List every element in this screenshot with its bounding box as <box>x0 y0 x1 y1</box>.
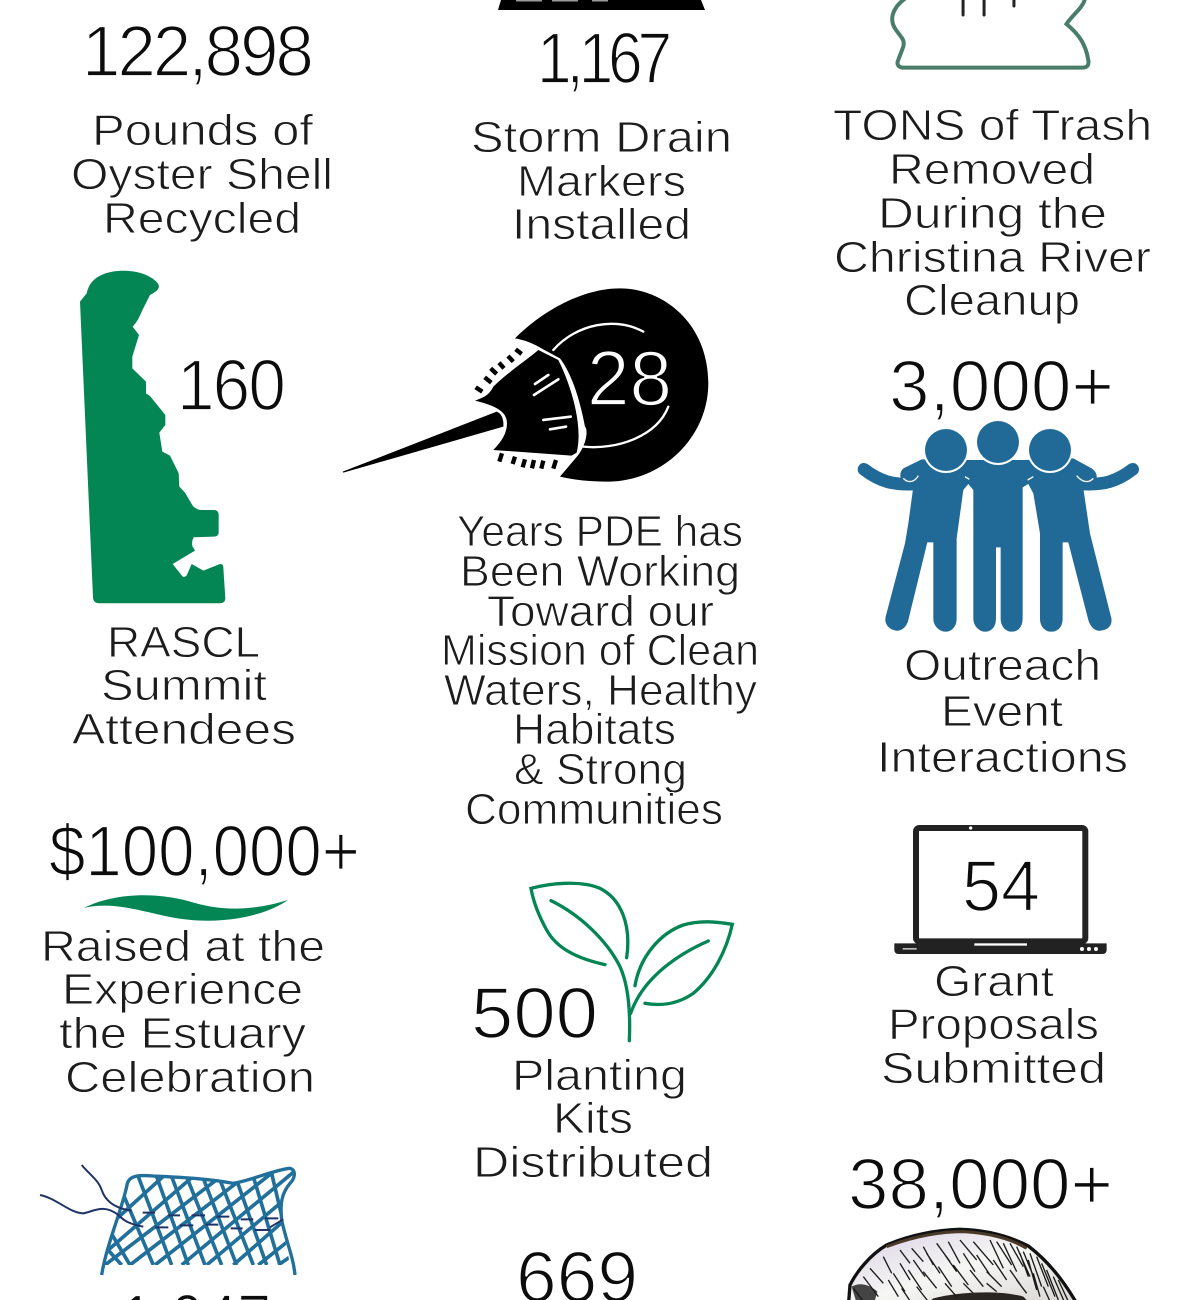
stat: storm drain markers <box>471 0 732 249</box>
label: outreach event interactions <box>877 641 1128 782</box>
number: 28: 28 <box>587 334 672 422</box>
number: 54: 54 <box>962 847 1040 927</box>
label: years PDE has been working toward mission: & Strong <box>514 745 687 794</box>
label: years PDE has been working toward mission: Waters, Healthy <box>444 666 757 715</box>
number: 500: 500 <box>471 974 598 1054</box>
stat: 38,000+ oysters <box>848 1145 1113 1300</box>
number: $100,000+: $100,000+ <box>49 812 360 892</box>
label: grant proposals submitted: Submitted <box>881 1044 1106 1093</box>
icon: storm drain marker <box>498 0 705 10</box>
label: RASCL summit attendees: Summit <box>101 661 267 710</box>
icon: trash bag <box>892 0 1088 68</box>
label: raised at the celebration: Experience <box>62 965 303 1014</box>
label: tons of trash removed: During the <box>878 189 1107 238</box>
stat: planting kits distributed <box>471 883 732 1187</box>
label: pounds of oyster shell recycled: Recycled <box>103 194 301 243</box>
icon: laptop <box>894 826 1107 954</box>
label: tons of trash removed: Christina River <box>834 233 1151 282</box>
stat: years PDE has been working <box>343 288 759 834</box>
label: outreach event interactions: Interactions <box>877 733 1128 782</box>
label: years PDE has been working toward mission: Mission of Clean <box>441 626 759 675</box>
stat: raised at Experience the Estuary <box>41 812 360 1102</box>
label: tons of trash removed: Cleanup <box>904 276 1080 325</box>
label: tons of trash removed: TONS of Trash <box>833 101 1152 150</box>
icon: fishing net <box>40 1165 300 1275</box>
label: raised at the celebration: the Estuary <box>59 1009 306 1058</box>
icon: green swoosh <box>84 895 288 921</box>
label: years PDE has been working toward mission <box>441 507 759 834</box>
stat: oyster shell recycled <box>71 12 333 243</box>
label: tons of trash removed <box>833 101 1152 325</box>
label: years PDE has been working toward mission: Been Working <box>460 547 740 596</box>
stat: outreach event interactions <box>864 347 1133 782</box>
number: 3,000+: 3,000+ <box>889 347 1114 427</box>
label: raised at the celebration: Celebration <box>65 1053 315 1102</box>
label: years PDE has been working toward mission: Communities <box>465 785 723 834</box>
label: grant proposals submitted <box>881 957 1106 1093</box>
label: pounds of oyster shell recycled <box>71 106 333 243</box>
label: outreach event interactions: Outreach <box>904 641 1101 690</box>
label: planting kits distributed <box>473 1051 713 1187</box>
label: storm drain markers installed: Storm Drain <box>471 113 732 162</box>
label: grant proposals submitted: Grant <box>934 957 1054 1006</box>
number: 1,167: 1,167 <box>537 19 670 99</box>
stat: fishing net <box>40 1165 300 1300</box>
number: 160: 160 <box>177 346 284 426</box>
label: RASCL summit attendees: Attendees <box>72 705 296 754</box>
number: 122,898: 122,898 <box>82 12 311 92</box>
stat: grant proposals submitted <box>881 826 1107 1093</box>
label: RASCL summit attendees: RASCL <box>107 618 260 667</box>
label: grant proposals submitted: Proposals <box>888 1000 1099 1049</box>
label: pounds of oyster shell recycled: Pounds of <box>92 106 314 155</box>
icon: three people embracing <box>864 419 1133 632</box>
label: raised at the celebration: Raised at the <box>41 922 325 971</box>
label: planting kits distributed: Kits <box>553 1094 633 1143</box>
label: tons of trash removed: Removed <box>889 145 1095 194</box>
icon: Delaware state map <box>80 271 225 603</box>
label: years PDE has been working toward mission: Years PDE has <box>457 507 743 556</box>
icon: horseshoe crab <box>343 288 708 482</box>
stat: tons of trash removed <box>833 0 1152 325</box>
label: years PDE has been working toward mission: Toward our <box>487 587 714 636</box>
number: 38,000+: 38,000+ <box>848 1145 1113 1225</box>
label: storm drain markers installed <box>471 113 732 249</box>
label: years PDE has been working toward mission: Habitats <box>513 705 676 754</box>
label: planting kits distributed: Planting <box>512 1051 687 1100</box>
stat: RASCL summit attendees <box>72 271 296 754</box>
label: pounds of oyster shell recycled: Oyster Shell <box>71 150 333 199</box>
label: outreach event interactions: Event <box>941 687 1063 736</box>
label: raised at the celebration <box>41 922 325 1102</box>
label: storm drain markers installed: Markers <box>517 157 686 206</box>
label: planting kits distributed: Distributed <box>473 1138 713 1187</box>
label: storm drain markers installed: Installed <box>512 200 691 249</box>
icon: plant sprout <box>531 883 732 1041</box>
label: RASCL summit attendees <box>72 618 296 754</box>
icon: oyster shell illustration <box>848 1229 1078 1300</box>
